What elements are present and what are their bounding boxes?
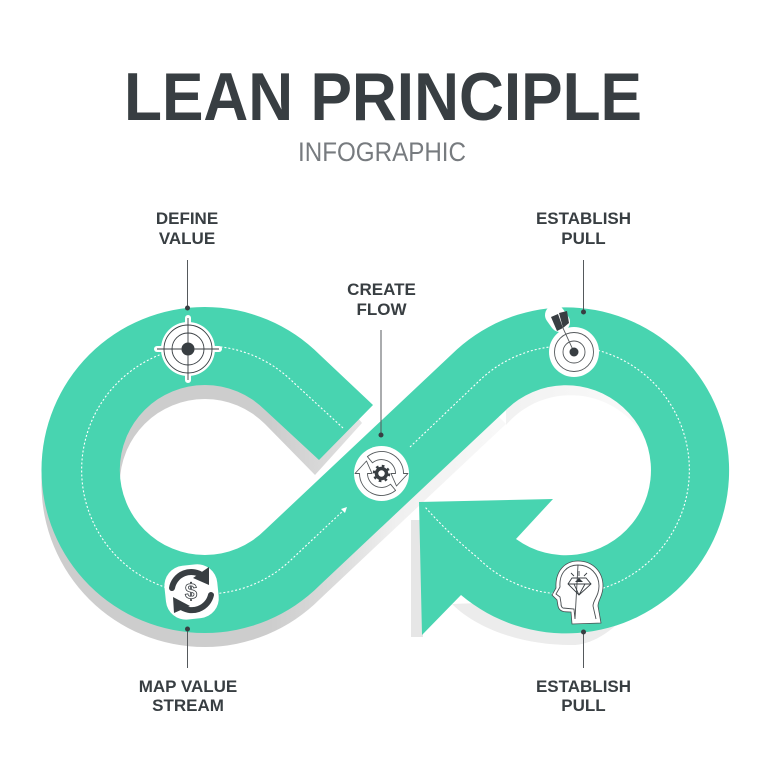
- icon: money cycle: [162, 562, 221, 622]
- icon: head with diamond: [552, 561, 603, 624]
- dotted path: right loop: [410, 346, 689, 594]
- label: map value stream: MAP VALUE: [139, 677, 237, 696]
- shadow: right loop bottom crescent: [452, 600, 615, 645]
- leader: create flow: [378, 330, 384, 438]
- leader: establish pull top: [581, 260, 586, 314]
- label: define value: DEFINE: [156, 209, 218, 228]
- infinity arrow diagram: [41, 307, 729, 647]
- dotted path arrowhead: [341, 507, 347, 513]
- shadow: arrow head: [411, 520, 423, 637]
- shadow: left loop and middle band: [41, 321, 506, 647]
- subtitle: INFOGRAPHIC: [298, 137, 466, 167]
- leader: map value stream: [185, 626, 190, 668]
- dotted path: left loop: [82, 346, 345, 594]
- flow arrow band: bottom: [355, 461, 396, 496]
- title: LEAN PRINCIPLE: [124, 59, 642, 135]
- label: establish pull top: ESTABLISH: [536, 209, 631, 228]
- teal infinity band with arrow: [41, 307, 729, 635]
- icon: flow cycle gear: [354, 446, 409, 501]
- label: establish pull bottom: PULL: [561, 696, 606, 715]
- label: define value: VALUE: [159, 229, 215, 248]
- label: create flow: FLOW: [356, 300, 407, 319]
- icon: crosshair target: [154, 315, 222, 383]
- leader: define value: [185, 260, 190, 310]
- icon: dart in target: [549, 311, 599, 377]
- label: create flow: CREATE: [347, 280, 416, 299]
- shadow: right loop top crescent: [506, 385, 645, 439]
- gear: [374, 466, 389, 481]
- flow arrow band: top: [367, 451, 408, 486]
- icon: money cycle: $: [185, 579, 197, 604]
- label: map value stream: STREAM: [152, 696, 224, 715]
- leader: establish pull bottom: [581, 630, 586, 668]
- label: establish pull top: PULL: [561, 229, 606, 248]
- label: establish pull bottom: ESTABLISH: [536, 677, 631, 696]
